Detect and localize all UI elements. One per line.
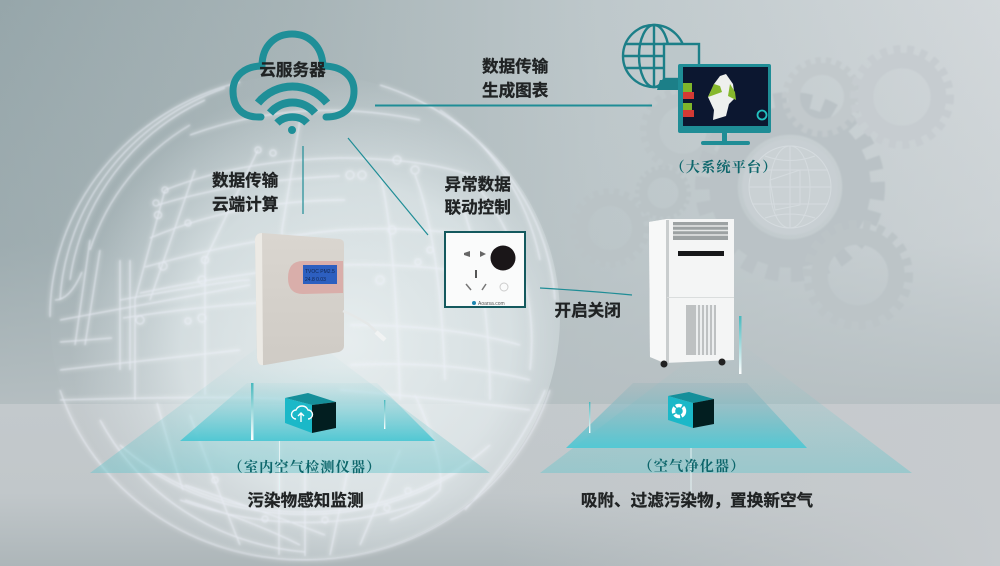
label: indoor air detector: （室内空气检测仪器）: [229, 459, 381, 476]
connector lines: [303, 106, 652, 295]
caption: pollutant sensing: 污染物感知监测: [247, 490, 364, 510]
left inner trapezoid: [180, 383, 435, 441]
light posts: [251, 316, 742, 494]
icon: right cube: [668, 392, 714, 428]
label: data transfer compute: 云端计算: [212, 194, 278, 214]
left floor triangle: [90, 323, 490, 473]
icon: cloud with wifi: [233, 34, 354, 134]
label: big system platform: （大系统平台）: [670, 159, 778, 176]
device: smart socket: [445, 232, 525, 307]
caption: filter and replace: 吸附、过滤污染物，置换新空气: [581, 490, 814, 510]
device: air purifier: [649, 219, 734, 368]
label: open close: 开启关闭: [554, 301, 621, 320]
label: abnormal data control: 异常数据: [444, 175, 511, 194]
label: data transfer charts: 生成图表: [482, 80, 549, 100]
device: air quality detector: TVOC PM2.5: [305, 269, 335, 275]
right inner trapezoid: [566, 383, 807, 448]
icon: globe with computer: [623, 25, 699, 90]
device: air quality detector: [255, 233, 385, 365]
label: data transfer compute: 数据传输: [212, 170, 279, 190]
gears backdrop: [573, 49, 950, 326]
label: air purifier: （空气净化器）: [638, 458, 746, 475]
device: air quality detector: 24.8 0.03: [305, 277, 326, 283]
icon: left cube: [285, 393, 336, 433]
heading: cloud server: 云服务器: [259, 60, 326, 80]
wireframe globe: [50, 74, 560, 560]
label: data transfer charts: 数据传输: [482, 56, 549, 76]
mini globe in gear: [749, 146, 831, 228]
icon: monitor dashboard: [678, 64, 771, 145]
label: abnormal data control: 联动控制: [444, 198, 511, 217]
device: smart socket: Aoarsa.com: [478, 301, 505, 307]
right floor triangle: [540, 332, 912, 473]
